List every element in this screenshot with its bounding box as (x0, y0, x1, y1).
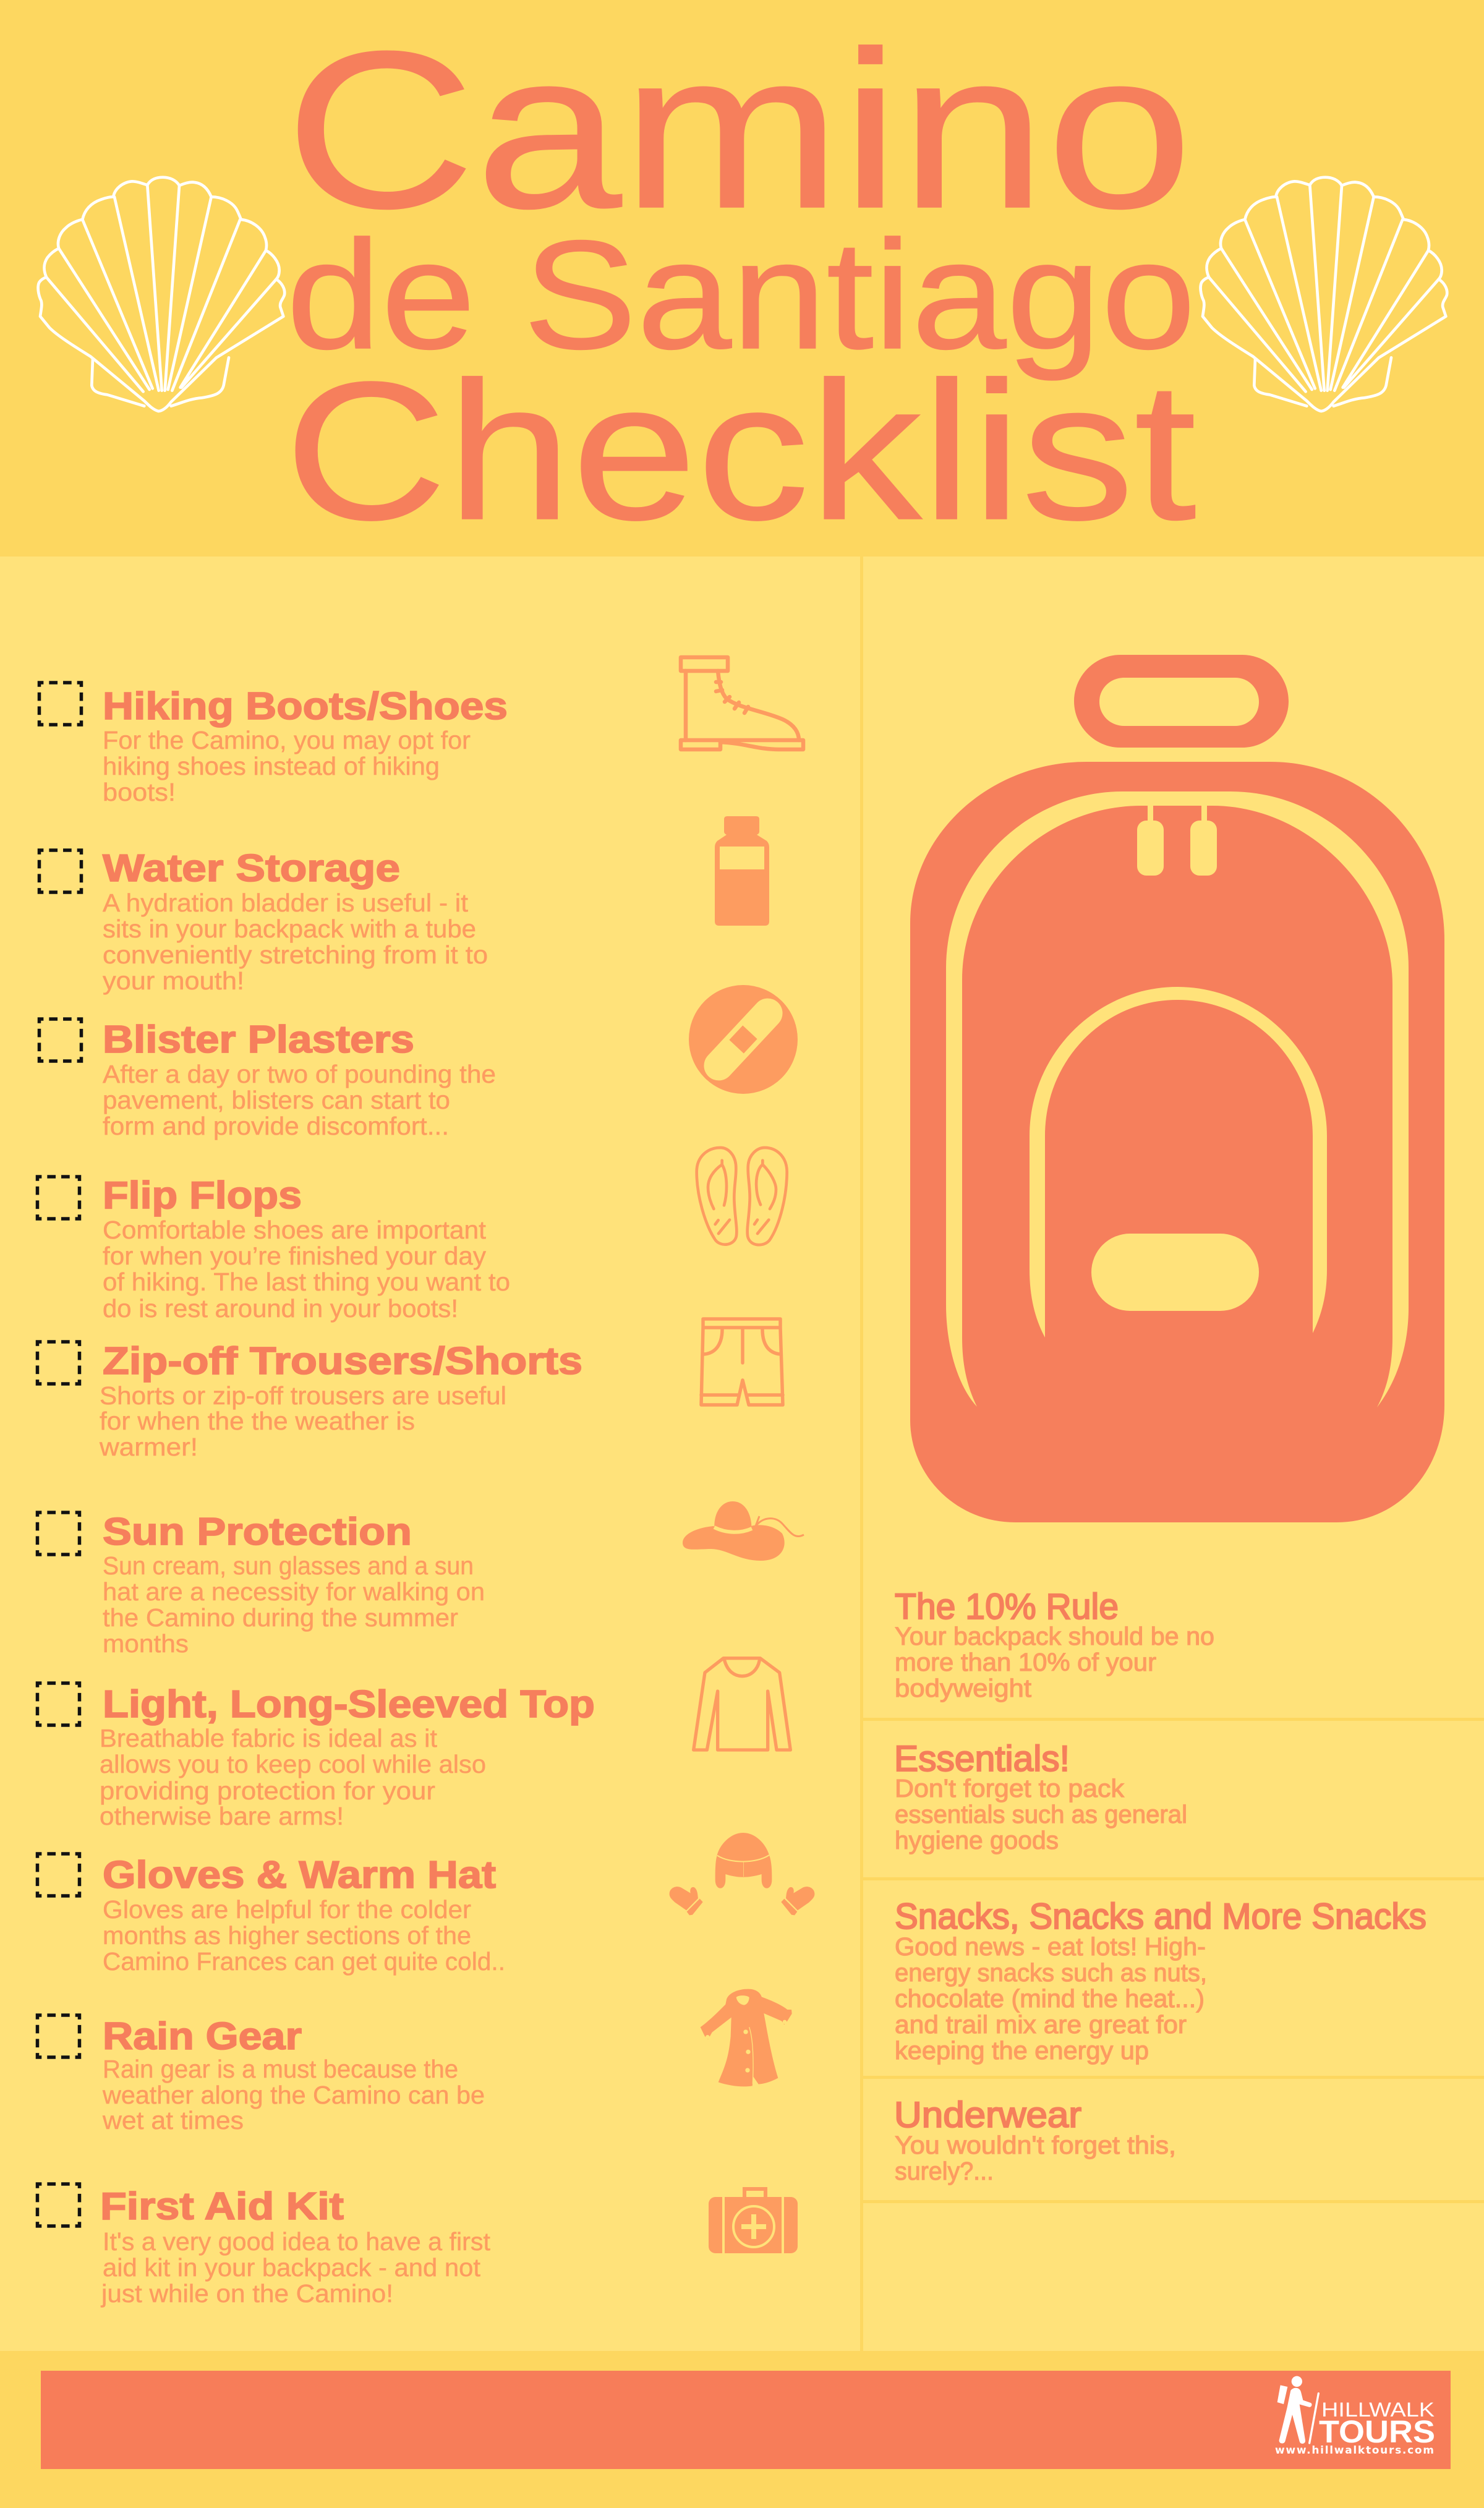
description: the Camino during the summer (103, 1603, 458, 1632)
icon: water bottle (715, 816, 769, 926)
tip: essentials: Essentials! (894, 1739, 1070, 1779)
icon: right scallop shell (1201, 177, 1447, 411)
description (103, 1895, 505, 1976)
zip pull left (1137, 804, 1164, 876)
icon: plaster (689, 985, 798, 1094)
heading: Sun Protection (103, 1511, 412, 1553)
description: otherwise bare arms! (100, 1802, 344, 1830)
description: Gloves are helpful for the colder (103, 1895, 471, 1924)
checkbox (37, 1342, 79, 1384)
description (103, 889, 488, 995)
description: months as higher sections of the (103, 1921, 471, 1950)
tip: the 10% rule: more than 10% of your (895, 1648, 1156, 1676)
tip: essentials: hygiene goods (895, 1826, 1059, 1854)
description: of hiking. The last thing you want to (103, 1268, 510, 1296)
title: Camino (285, 4, 1193, 255)
checkbox (37, 2015, 79, 2057)
icon: warm hat and mittens (670, 1833, 814, 1915)
checkbox (37, 1854, 79, 1896)
description (103, 1551, 485, 1658)
description: sits in your backpack with a tube (103, 915, 476, 943)
tip: snacks: Good news - eat lots! High- (895, 1932, 1206, 1961)
tip: snacks: energy snacks such as nuts, (895, 1958, 1207, 1987)
description (100, 1724, 486, 1830)
heading: Zip-off Trousers/Shorts (103, 1340, 582, 1383)
checklist item: blister plasters (40, 1018, 496, 1140)
logo url: www.hillwalktours.com (1275, 2444, 1434, 2457)
icon: first aid case (709, 2189, 798, 2253)
description: months (103, 1629, 189, 1658)
checkbox (37, 1683, 79, 1725)
tip: underwear: You wouldn't forget this, (895, 2131, 1176, 2159)
tip: the 10% rule: Your backpack should be no (895, 1622, 1214, 1650)
description: Camino Frances can get quite cold.. (103, 1947, 505, 1976)
heading: Gloves & Warm Hat (103, 1854, 496, 1896)
description: providing protection for your (100, 1777, 435, 1805)
tip: snacks (895, 1896, 1426, 2065)
tip: the 10% rule: The 10% Rule (895, 1587, 1119, 1627)
tip: snacks: keeping the energy up (895, 2036, 1149, 2065)
checkbox (40, 1019, 82, 1061)
tip: the 10% rule (895, 1587, 1214, 1702)
description: for when you’re finished your day (103, 1242, 487, 1270)
description: allows you to keep cool while also (100, 1750, 486, 1778)
heading: Water Storage (103, 847, 400, 890)
pocket arc (1030, 987, 1327, 1337)
footer bar (41, 2371, 1451, 2469)
tip: underwear: Underwear (894, 2095, 1081, 2135)
icon: long-sleeved top (694, 1658, 790, 1750)
description: form and provide discomfort... (103, 1112, 449, 1140)
checklist item: flip flops (37, 1174, 510, 1323)
column divider (860, 557, 863, 2351)
logo: Hillwalk Tours: TOURS (1319, 2414, 1435, 2449)
description: for when the the weather is (100, 1407, 415, 1435)
checklist item: long-sleeved top (37, 1683, 595, 1830)
icon: flip flops (697, 1148, 787, 1245)
icon: hiker (1277, 2376, 1318, 2444)
footer band (0, 2351, 1484, 2508)
description: just while on the Camino! (101, 2279, 393, 2308)
checkbox (40, 850, 82, 892)
description: hiking shoes instead of hiking (103, 752, 440, 780)
description (102, 2055, 485, 2135)
header band (0, 0, 1484, 557)
checkbox (37, 2184, 79, 2226)
description (99, 1381, 506, 1461)
checklist item: rain gear (37, 2015, 485, 2135)
logo wordmark: HILLWALK (1321, 2399, 1435, 2421)
tip: underwear: surely?... (895, 2157, 994, 2185)
tip: snacks: Snacks, Snacks and More Snacks (895, 1896, 1426, 1937)
tip: snacks: and trail mix are great for (895, 2010, 1187, 2039)
title (284, 4, 1197, 561)
icon: rain coat (701, 1989, 792, 2086)
description: A hydration bladder is useful - it (103, 889, 469, 917)
checkbox (37, 1177, 79, 1219)
description (103, 726, 471, 806)
description (103, 1060, 496, 1140)
checklist item: hiking boots (40, 683, 508, 806)
checklist item: gloves and hat (37, 1854, 505, 1976)
description: pavement, blisters can start to (103, 1086, 450, 1114)
tip: essentials (894, 1739, 1187, 1854)
pocket pill (1091, 1234, 1259, 1311)
description: Comfortable shoes are important (103, 1216, 487, 1244)
description: your mouth! (103, 966, 244, 995)
tip: essentials: essentials such as general (895, 1800, 1187, 1828)
description (103, 1216, 510, 1323)
description: Shorts or zip-off trousers are useful (100, 1381, 506, 1410)
pack body (910, 762, 1444, 1522)
icon: shorts (701, 1319, 783, 1405)
heading: Blister Plasters (103, 1018, 414, 1061)
description: It's a very good idea to have a first (103, 2227, 491, 2256)
description: After a day or two of pounding the (103, 1060, 496, 1088)
checklist item: first aid kit (37, 2184, 491, 2308)
description: Rain gear is a must because the (103, 2055, 458, 2083)
checklist item: zip-off trousers (37, 1340, 582, 1461)
description: conveniently stretching from it to (103, 941, 488, 969)
description: boots! (103, 778, 176, 806)
description (101, 2227, 491, 2308)
tip: the 10% rule: bodyweight (895, 1674, 1032, 1702)
description: do is rest around in your boots! (103, 1294, 458, 1323)
checklist item: sun protection (37, 1511, 485, 1658)
description: weather along the Camino can be (102, 2081, 485, 2109)
tip: essentials: Don't forget to pack (895, 1774, 1125, 1802)
heading: First Aid Kit (100, 2185, 344, 2228)
icon: left scallop shell (38, 177, 284, 411)
heading: Hiking Boots/Shoes (103, 685, 508, 728)
icon: hiking boot (681, 657, 803, 749)
description: Sun cream, sun glasses and a sun (103, 1551, 474, 1580)
icon: sun hat (683, 1501, 804, 1561)
checklist item: water storage (40, 847, 488, 995)
description: hat are a necessity for walking on (103, 1577, 485, 1606)
title: de Santiago (286, 208, 1196, 381)
description: warmer! (99, 1433, 198, 1461)
title: Checklist (284, 341, 1197, 561)
top handle (1074, 655, 1289, 748)
description: aid kit in your backpack - and not (103, 2253, 481, 2282)
heading: Light, Long-Sleeved Top (103, 1683, 595, 1726)
zip pull right (1190, 804, 1217, 876)
logo: Hillwalk Tours (1275, 2376, 1435, 2457)
checkbox (40, 683, 82, 725)
tip: underwear (894, 2095, 1176, 2185)
description: wet at times (102, 2106, 244, 2135)
zip band (946, 791, 1409, 1407)
tip: snacks: chocolate (mind the heat...) (895, 1984, 1205, 2013)
checkbox (37, 1512, 79, 1555)
heading: Flip Flops (103, 1174, 302, 1217)
heading: Rain Gear (103, 2015, 302, 2058)
description: For the Camino, you may opt for (103, 726, 471, 754)
illustration: backpack (910, 655, 1444, 1522)
description: Breathable fabric is ideal as it (100, 1724, 438, 1752)
